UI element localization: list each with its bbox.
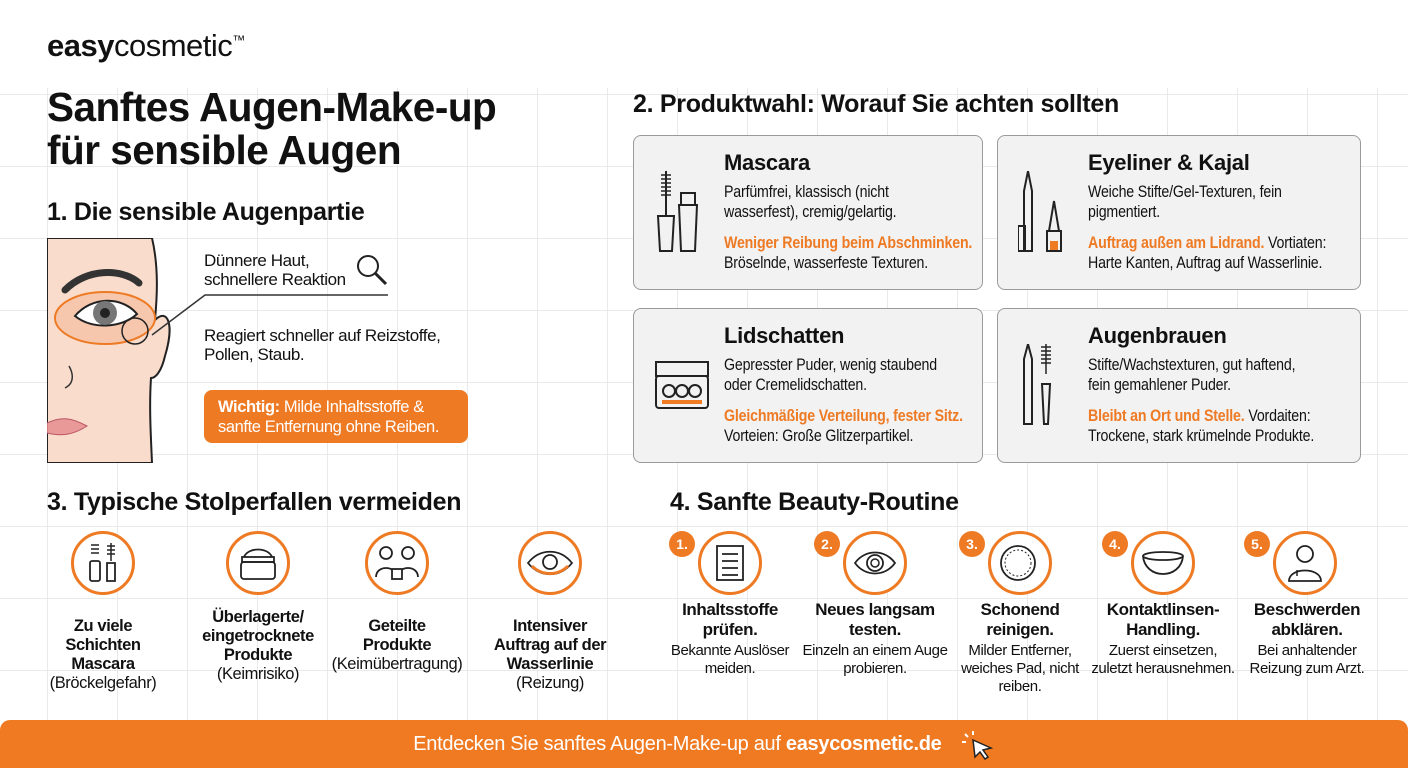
pitfall 2 xyxy=(202,531,314,683)
callout: important xyxy=(204,390,468,443)
pitfall 2: Überlagerte/ xyxy=(212,608,304,626)
header band xyxy=(0,0,1408,88)
text: reacts faster: Pollen, Staub. xyxy=(204,345,304,364)
step 4: Handling. xyxy=(1126,620,1200,639)
callout: important: Wichtig: Milde Inhaltsstoffe & sanfte Entfernung ohne Reiben. xyxy=(218,398,439,436)
illustration: face xyxy=(47,238,171,463)
heading: section 3: 3. Typische Stolperfallen vermeiden xyxy=(47,488,461,516)
pitfall 3: (Keimübertragung) xyxy=(332,655,462,673)
step 4: Zuerst einsetzen, zuletzt herausnehmen. xyxy=(1091,642,1235,677)
text: thinner skin xyxy=(204,251,346,289)
heading: section 4: 4. Sanfte Beauty-Routine xyxy=(670,488,959,516)
step 3: Schonend xyxy=(980,600,1059,619)
card: eyeliner xyxy=(997,135,1361,290)
badge 2 xyxy=(814,531,840,557)
pitfall 4 xyxy=(494,531,606,692)
footer banner xyxy=(0,720,1408,768)
badge 1: 1. xyxy=(676,536,688,552)
text: thinner skin: schnellere Reaktion xyxy=(204,270,346,289)
card: eyeliner: pigmentiert. xyxy=(1088,203,1160,221)
card: eyeshadow: oder Cremelidschatten. xyxy=(724,376,867,394)
icon: cursor xyxy=(962,731,994,760)
heading: section 1: 1. Die sensible Augenpartie xyxy=(47,198,364,226)
title: für sensible Augen xyxy=(47,127,401,173)
card: eyebrows: fein gemahlener Puder. xyxy=(1088,376,1231,394)
pitfall 4: Intensiver xyxy=(513,617,587,635)
card: eyebrows xyxy=(997,308,1361,463)
icon: cotton pad xyxy=(988,531,1052,595)
icon: doctor xyxy=(1273,531,1337,595)
icon: eyeliner xyxy=(1018,171,1062,252)
step 5 xyxy=(1244,531,1364,677)
card: eyeshadow: Vorteien: Große Glitzerpartikel. xyxy=(724,427,913,445)
card: mascara: Weniger Reibung beim Abschminken. xyxy=(724,234,972,252)
icon: mascara xyxy=(656,171,698,252)
icon: people sharing xyxy=(365,531,429,595)
step 3 xyxy=(959,531,1080,695)
callout line xyxy=(152,294,388,336)
card: eyeshadow: Gleichmäßige Verteilung, fester Sitz. xyxy=(724,407,963,425)
card: eyebrows: Stifte/Wachstexturen, gut haftend, xyxy=(1088,356,1295,374)
pitfall 2: (Keimrisiko) xyxy=(217,665,299,683)
step 2: Neues langsam xyxy=(815,600,935,619)
step 1 xyxy=(669,531,790,677)
text: thinner skin: Dünnere Haut, xyxy=(204,251,309,270)
pitfall 3: Produkte xyxy=(363,636,431,654)
card: mascara: Mascara xyxy=(724,150,810,175)
pitfall 3: Geteilte xyxy=(368,617,426,635)
step 3: Milder Entferner, weiches Pad, nicht reiben. xyxy=(961,642,1079,695)
card: eyeliner: Weiche Stifte/Gel-Texturen, fein xyxy=(1088,183,1282,201)
card: eyebrows: Trockene, stark krümelnde Produkte. xyxy=(1088,427,1314,445)
text: reacts faster xyxy=(204,326,440,364)
badge 4: 4. xyxy=(1109,536,1121,552)
pitfall 4: Auftrag auf der xyxy=(494,636,606,654)
step 2: Einzeln an einem Auge probieren. xyxy=(802,642,948,677)
badge 4 xyxy=(1102,531,1128,557)
step 5: abklären. xyxy=(1271,620,1343,639)
step 4: Kontaktlinsen- xyxy=(1107,600,1219,619)
card: mascara: wasserfest), cremig/gelartig. xyxy=(724,203,896,221)
card: mascara xyxy=(633,135,983,290)
pitfall 1: Schichten xyxy=(65,636,141,654)
icon: palette xyxy=(655,361,709,409)
card: eyeliner: Harte Kanten, Auftrag auf Wasserlinie. xyxy=(1088,254,1322,272)
logo: easycosmetic™ xyxy=(47,28,245,63)
step 4 xyxy=(1091,531,1235,677)
text: reacts faster: Reagiert schneller auf Reizstoffe, xyxy=(204,326,440,345)
icon: checklist xyxy=(698,531,762,595)
title: Sanftes Augen-Make-up xyxy=(47,84,496,130)
badge 1 xyxy=(669,531,695,557)
icon: eye xyxy=(843,531,907,595)
title xyxy=(47,84,496,173)
badge 5 xyxy=(1244,531,1270,557)
card: eyebrows: Bleibt an Ort und Stelle. Vordaiten: xyxy=(1088,407,1311,425)
pitfall 2: Produkte xyxy=(224,646,292,664)
pitfall 3 xyxy=(332,531,462,673)
step 1: Bekannte Auslöser meiden. xyxy=(671,642,789,677)
footer banner: Entdecken Sie sanftes Augen-Make-up auf easycosmetic.de xyxy=(413,733,942,755)
step 1: Inhaltsstoffe xyxy=(682,600,778,619)
card: eyebrows: Augenbrauen xyxy=(1088,323,1226,348)
card: eyeshadow: Gepresster Puder, wenig staubend xyxy=(724,356,937,374)
pitfall 4: (Reizung) xyxy=(516,674,584,692)
badge 3 xyxy=(959,531,985,557)
icon: jar xyxy=(226,531,290,595)
badge 3: 3. xyxy=(966,536,978,552)
step 2 xyxy=(802,531,948,677)
icon: mascara circle xyxy=(71,531,135,595)
pitfall 4: Wasserlinie xyxy=(507,655,593,673)
card: mascara: Bröselnde, wasserfeste Texturen. xyxy=(724,254,928,272)
icon: brow pencil xyxy=(1023,344,1052,425)
card: mascara: Parfümfrei, klassisch (nicht xyxy=(724,183,889,201)
card: eyeshadow xyxy=(633,308,983,463)
badge 2: 2. xyxy=(821,536,833,552)
step 5: Bei anhaltender Reizung zum Arzt. xyxy=(1250,642,1364,677)
badge 5: 5. xyxy=(1251,536,1263,552)
step 2: testen. xyxy=(849,620,901,639)
step 3: reinigen. xyxy=(986,620,1054,639)
heading: section 2: 2. Produktwahl: Worauf Sie achten sollten xyxy=(633,90,1119,118)
icon: magnifier xyxy=(357,255,387,285)
card: eyeliner: Eyeliner & Kajal xyxy=(1088,150,1250,175)
step 1: prüfen. xyxy=(703,620,757,639)
icon: eye waterline xyxy=(518,531,582,595)
pitfall 1: Zu viele xyxy=(74,617,132,635)
pitfall 1: Mascara xyxy=(71,655,135,673)
card: eyeshadow: Lidschatten xyxy=(724,323,844,348)
icon: contact lens xyxy=(1131,531,1195,595)
step 5: Beschwerden xyxy=(1254,600,1360,619)
pitfall 1 xyxy=(50,531,156,692)
pitfall 1: (Bröckelgefahr) xyxy=(50,674,156,692)
pitfall 2: eingetrocknete xyxy=(202,627,314,645)
card: eyeliner: Auftrag außen am Lidrand. Vortiaten: xyxy=(1088,234,1326,252)
